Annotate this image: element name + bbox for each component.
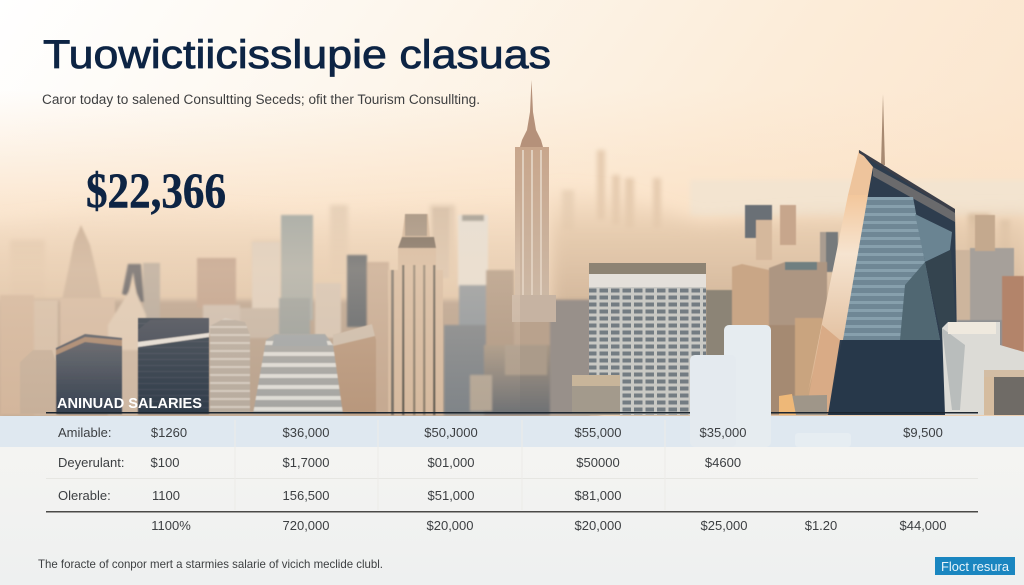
row: Deyerulant: Deyerulant: — [58, 455, 124, 470]
big salary figure: $22,366 — [86, 162, 226, 218]
low city base — [0, 300, 600, 416]
white office building with window grid — [589, 263, 706, 415]
row: totals: 720,000 — [282, 518, 330, 533]
salary table rows — [58, 425, 946, 533]
bottom table rule — [46, 511, 978, 512]
sky warm haze — [0, 90, 1024, 420]
glass skyscraper — [808, 150, 958, 415]
row: Olerable: 1100 — [152, 488, 180, 503]
footnote: The foracte of conpor mert a starmies salarie of vicich meclide clubl. — [38, 557, 383, 571]
row: Deyerulant — [58, 455, 741, 470]
far city mass — [0, 185, 1024, 420]
right foreground buildings — [779, 322, 1024, 415]
table panel background — [0, 416, 1024, 585]
table grid lines — [46, 420, 978, 510]
left skyline, foreground buildings — [20, 214, 443, 415]
row: Amilable — [58, 425, 943, 440]
low rooftop building — [572, 375, 620, 415]
row: Amilable: Amilable: — [58, 425, 111, 440]
row: Olerable: 156,500 — [282, 488, 330, 503]
row: totals — [151, 518, 946, 533]
highlighted first row band — [0, 416, 1024, 447]
sky background — [0, 0, 1024, 420]
distant water — [690, 180, 1024, 216]
row: Amilable: $36,000 — [282, 425, 330, 440]
top table rule — [46, 412, 978, 414]
empire state style tower — [512, 80, 556, 322]
row: Amilable: $1260 — [151, 425, 187, 440]
white bar shapes — [690, 325, 851, 447]
left skyline, hazy mid-ground towers — [0, 208, 590, 416]
row: Deyerulant: $1,7000 — [282, 455, 330, 470]
row: Deyerulant: $4600 — [705, 455, 741, 470]
row: totals: $44,000 — [900, 518, 946, 533]
spire behind glass tower — [881, 94, 885, 165]
row: Olerable: Olerable: — [58, 488, 111, 503]
row: Olerable: $81,000 — [574, 488, 622, 503]
subtitle: Caror today to salened Consultting Seceds; ofit ther Tourism Consullting. — [42, 92, 480, 107]
table heading: ANINUAD SALARIES — [57, 396, 202, 412]
row: Deyerulant: $01,000 — [428, 455, 474, 470]
row: totals: $20,000 — [574, 518, 622, 533]
row: Olerable: $51,000 — [428, 488, 474, 503]
row: Deyerulant: $100 — [151, 455, 179, 470]
row: Olerable — [58, 488, 622, 503]
distant skyline — [10, 150, 1010, 320]
right skyline, mid-ground buildings — [620, 205, 1024, 415]
row: totals: $1.20 — [805, 518, 837, 533]
row: Amilable: $55,000 — [574, 425, 622, 440]
badge button: Floct resura — [941, 559, 1010, 574]
row: Amilable: $35,000 — [700, 425, 746, 440]
row: totals: $20,000 — [426, 518, 474, 533]
row: totals: 1100% — [151, 518, 191, 533]
row: Amilable: $9,500 — [903, 425, 943, 440]
row: Amilable: $50,J000 — [424, 425, 478, 440]
row: totals: $25,000 — [700, 518, 748, 533]
whole-scene haze veil — [0, 190, 520, 416]
title: Tuowictiicisslupie clasuas — [43, 33, 551, 77]
row: Deyerulant: $50000 — [576, 455, 620, 470]
